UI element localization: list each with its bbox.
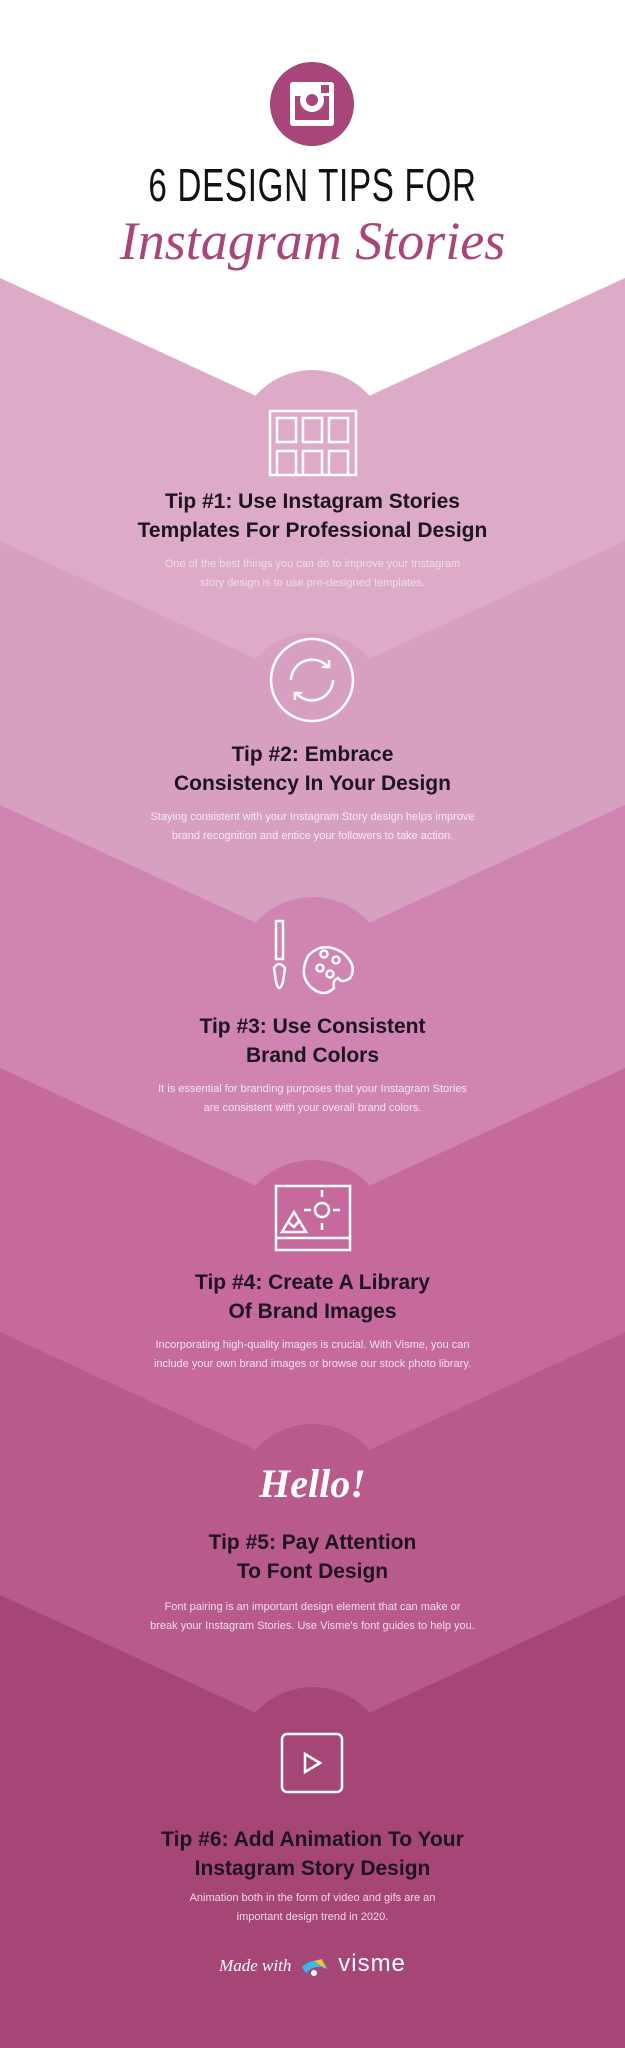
tip 6 text: Tip #6: Add Animation To Your — [161, 1828, 464, 1851]
tip 6 text: Animation both in the form of video and gifs are an — [190, 1892, 435, 1904]
tip 1 text: Templates For Professional Design — [138, 519, 487, 542]
tip 5 text: break your Instagram Stories. Use Visme's font guides to help you. — [150, 1620, 475, 1632]
tip 5 text: To Font Design — [237, 1560, 388, 1583]
tip 5 text — [150, 1531, 475, 1632]
tip 2 text — [150, 743, 475, 842]
tip 2 text: Tip #2: Embrace — [232, 743, 393, 766]
tip 5 text: Font pairing is an important design element that can make or — [165, 1601, 460, 1613]
tip 3 text: Brand Colors — [246, 1044, 379, 1067]
tip 4 text: Incorporating high-quality images is crucial. With Visme, you can — [155, 1339, 470, 1351]
tip 1 text: story design is to use pre-designed templates. — [200, 577, 425, 589]
icon: play button — [280, 1732, 344, 1794]
title — [120, 159, 505, 271]
title: 6 DESIGN TIPS FOR — [148, 159, 477, 211]
tip 4 text: Tip #4: Create A Library — [195, 1271, 430, 1294]
tip 3 text: are consistent with your overall brand colors. — [204, 1102, 421, 1114]
title: Instagram Stories — [120, 211, 505, 271]
tip 6 text — [161, 1828, 464, 1923]
tip 2 text: Consistency In Your Design — [174, 772, 451, 795]
tip 1 text — [138, 490, 487, 589]
tip 3 text: Tip #3: Use Consistent — [200, 1015, 426, 1038]
tip 1 text: One of the best things you can do to improve your Instagram — [165, 558, 460, 570]
tip 3 text — [158, 1015, 467, 1114]
tip 6 text: Instagram Story Design — [195, 1857, 430, 1880]
icon: instagram logo — [270, 62, 354, 146]
footer: made with visme: Made with visme — [219, 1950, 406, 1977]
tip 6 text: important design trend in 2020. — [237, 1911, 388, 1923]
tip 4 text: include your own brand images or browse our stock photo library. — [154, 1358, 471, 1370]
tip 2 text: Staying consistent with your Instagram Story design helps improve — [150, 811, 475, 823]
tip 1 text: Tip #1: Use Instagram Stories — [165, 490, 460, 513]
icon: templates grid — [268, 410, 358, 476]
icon: hello script: Hello! — [259, 1461, 366, 1506]
tip 2 text: brand recognition and entice your followers to take action. — [172, 830, 453, 842]
icon: image frame — [274, 1184, 352, 1252]
tip 3 text: It is essential for branding purposes that your Instagram Stories — [158, 1083, 467, 1095]
icon: brush and palette — [272, 920, 354, 994]
tip 5 text: Tip #5: Pay Attention — [209, 1531, 416, 1554]
tip 4 text: Of Brand Images — [228, 1300, 397, 1323]
icon: refresh circle — [270, 638, 354, 722]
tip 4 text — [154, 1271, 471, 1370]
